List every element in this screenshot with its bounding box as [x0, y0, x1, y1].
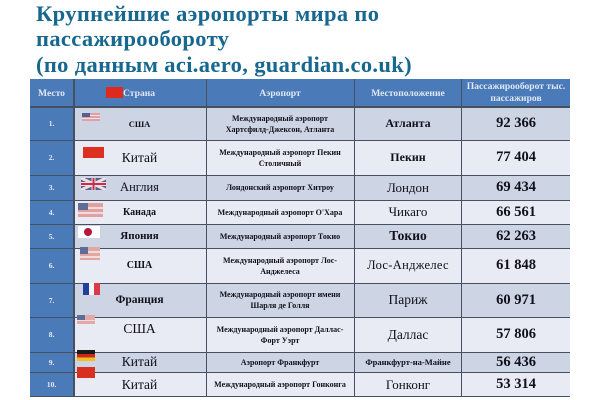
row 5: Япония: [120, 230, 159, 242]
row 2: Столичный: [259, 158, 301, 168]
row 8: 8.: [49, 330, 54, 339]
row 10: Гонконг: [386, 376, 430, 392]
row 4: 4.: [49, 208, 54, 216]
icon: France flag: [83, 283, 100, 295]
header row: Местоположение: [371, 88, 445, 98]
row 7: Франция: [115, 294, 164, 306]
row 7: Париж: [388, 292, 428, 307]
icon: China flag row 2: [83, 147, 104, 158]
row 4: Международный аэропорт О'Хара: [218, 208, 342, 216]
row 1: Хартсфилд-Джексон, Атланта: [226, 124, 334, 134]
row 9: Китай: [122, 354, 157, 369]
row 6: Лос-Анджелес: [367, 258, 449, 272]
icon: China flag header: [106, 87, 123, 98]
header row: Аэропорт: [259, 88, 301, 98]
row 9: 9.: [49, 358, 54, 366]
icon: Japan flag: [78, 226, 100, 238]
row 1: США: [129, 118, 150, 128]
row 4: [30, 200, 570, 224]
row 2: 2.: [49, 153, 54, 162]
row 4: 66 561: [496, 204, 536, 220]
row 2: [30, 140, 570, 175]
row 5: Международный аэропорт Токио: [220, 232, 340, 240]
row 2: 77 404: [496, 149, 536, 165]
row 1: Атланта: [385, 116, 431, 130]
row 9: Франкфурт-на-Майне: [365, 357, 451, 367]
icon: USA flag row 1: [82, 113, 100, 121]
row 6: Международный аэропорт Лос-: [223, 256, 337, 264]
row 8: 57 806: [496, 326, 536, 342]
row 1: 1.: [49, 119, 54, 128]
row 10: 10.: [47, 380, 56, 389]
row 2: Пекин: [390, 150, 426, 164]
icon: USA flag row 6: [80, 247, 100, 260]
row 3: Англия: [120, 180, 159, 194]
row 3: 3.: [49, 183, 54, 192]
icon: Germany flag: [77, 350, 95, 361]
row 3: 69 434: [496, 179, 536, 195]
row 4: Чикаго: [389, 204, 427, 219]
row 1: Международный аэропорт: [232, 114, 328, 122]
icon: USA flag row 8: [77, 315, 95, 324]
header row: пассажиров: [490, 93, 542, 104]
row 6: 6.: [49, 261, 54, 270]
icon: China flag row 10: [77, 367, 95, 378]
row 7: Международный аэропорт имени: [220, 290, 340, 299]
row 8: Даллас: [388, 326, 428, 342]
row 6: [30, 248, 570, 283]
title: (по данным aci.aero, guardian.co.uk): [36, 52, 412, 77]
title: [36, 1, 412, 77]
table: [30, 79, 570, 397]
row 1: [30, 107, 570, 140]
row 8: Международный аэропорт Даллас-: [217, 324, 343, 334]
row 7: 7.: [49, 296, 54, 304]
row 5: 62 263: [496, 228, 536, 244]
row 1: 92 366: [496, 115, 536, 131]
row 2: Китай: [122, 150, 157, 164]
row 8: Форт Уэрт: [261, 336, 299, 344]
row 4: Канада: [123, 206, 156, 218]
row 10: 53 314: [496, 376, 536, 392]
row 3: Лондон: [387, 180, 429, 194]
row 7: Шарля де Голля: [250, 301, 310, 310]
row 2: Международный аэропорт Пекин: [219, 148, 341, 156]
row 6: Анджелеса: [260, 266, 300, 276]
row 5: Токио: [389, 228, 427, 243]
row 7: [30, 283, 570, 317]
row 5: [30, 224, 570, 248]
row 8: США: [123, 321, 156, 336]
row 9: [30, 352, 570, 372]
icon: UK flag: [81, 178, 106, 190]
header row: [30, 79, 570, 107]
row 9: Аэропорт Франкфурт: [241, 358, 319, 366]
header row: Пассажирооборот тыс.: [467, 81, 565, 92]
row 10: Международный аэропорт Гонконга: [214, 380, 346, 389]
header row: Место: [38, 88, 65, 98]
title: пассажирообороту: [36, 26, 229, 51]
row 6: США: [127, 260, 152, 271]
row 9: 56 436: [496, 354, 536, 370]
row 3: Лондонский аэропорт Хитроу: [226, 183, 334, 192]
icon: USA flag row 4: [78, 203, 103, 217]
row 8: [30, 317, 570, 352]
row 10: [30, 372, 570, 397]
row 5: 5.: [49, 232, 54, 240]
row 10: Китай: [122, 376, 157, 392]
row 6: 61 848: [496, 257, 536, 273]
title: Крупнейшие аэропорты мира по: [36, 1, 379, 26]
row 3: [30, 175, 570, 200]
header row: Страна: [123, 88, 155, 98]
row 7: 60 971: [496, 292, 536, 308]
